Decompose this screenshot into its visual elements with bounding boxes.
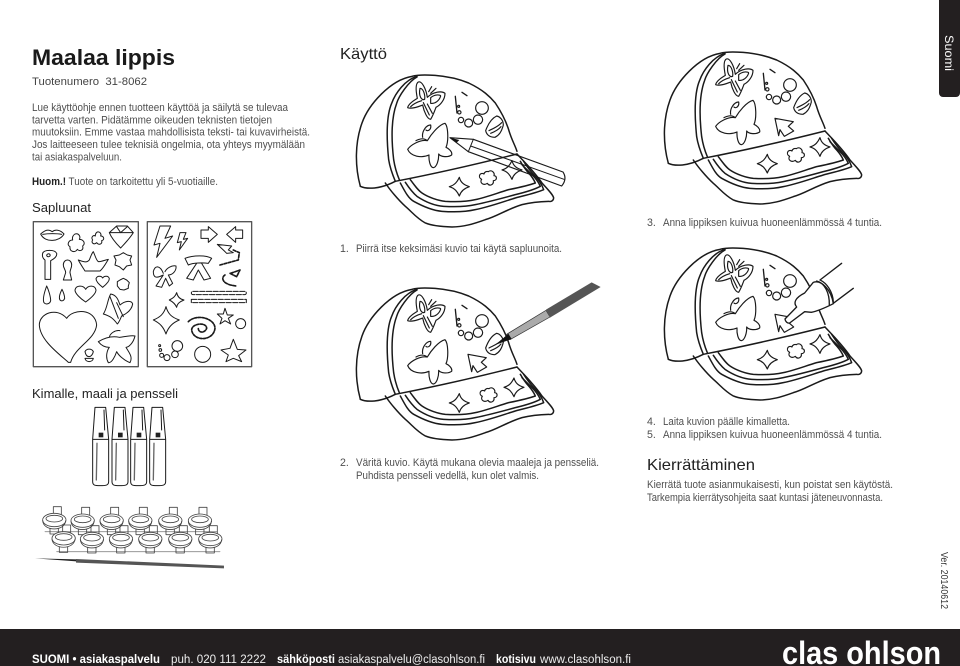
brush	[35, 558, 224, 568]
stencil sheet 1	[33, 222, 138, 367]
recycling text: Tarkempia kierrätysohjeita saat kuntasi jäteneuvonnasta.	[647, 492, 883, 504]
paint pots and brush	[35, 507, 224, 568]
contact line: kotisivu	[496, 654, 536, 666]
intro text: tai asiakaspalveluun.	[32, 152, 122, 164]
step 1 text: 1.	[340, 243, 349, 255]
contact line: asiakaspalvelu@clasohlson.fi	[338, 654, 485, 666]
version: Ver. 20140612	[938, 552, 950, 609]
contact line: sähköposti	[277, 654, 335, 666]
step 2 text: Väritä kuvio. Käytä mukana olevia maaleja ja pensseliä.	[356, 457, 599, 469]
heading: stencils: Sapluunat	[32, 200, 91, 215]
stencil sheet 2	[147, 222, 252, 367]
steps 4 and 5 text: Laita kuvion päälle kimalletta.	[663, 416, 790, 428]
cap with glitter tube: step 4	[664, 248, 862, 400]
glitter tube	[785, 263, 853, 323]
step 3 text: 3.	[647, 217, 656, 229]
step 2 text: Puhdista pensseli vedellä, kun olet valmis.	[356, 470, 539, 482]
heading: usage: Käyttö	[340, 46, 387, 63]
step 2 text	[340, 457, 599, 482]
intro text: Jos laitteeseen tulee teknisiä ongelmia, ota yhteys myymälään	[32, 139, 305, 151]
steps 4 and 5 text: Anna lippiksen kuivua huoneenlämmössä 4 tuntia.	[663, 429, 882, 441]
age warning: Huom.! Tuote on tarkoitettu yli 5-vuotiaille.	[32, 176, 218, 188]
paint pots	[43, 507, 222, 553]
intro text: muutoksiin. Emme vastaa mahdollisista teksti- tai kuvavirheistä.	[32, 126, 310, 138]
glitter tubes	[93, 407, 166, 486]
title: Maalaa lippis	[32, 45, 175, 70]
steps 4 and 5 text: 5.	[647, 429, 656, 441]
language tab: Suomi	[942, 35, 956, 71]
intro text	[32, 102, 310, 164]
cap with brush: step 2	[356, 282, 601, 440]
step 1 text: Piirrä itse keksimäsi kuvio tai käytä sapluunoita.	[356, 243, 562, 255]
contact line: puh. 020 111 2222	[171, 654, 266, 666]
footer bar	[0, 629, 960, 666]
steps 4 and 5 text	[647, 416, 882, 441]
step 2 text: 2.	[340, 457, 349, 469]
intro text: tarvetta varten. Pidätämme oikeuden teknisten tietojen	[32, 114, 272, 126]
product number: Tuotenumero 31-8062	[32, 76, 147, 88]
language tab	[939, 0, 960, 97]
cap drying: step 3	[664, 52, 862, 204]
step 3 text: Anna lippiksen kuivua huoneenlämmössä 4 tuntia.	[663, 217, 882, 229]
recycling text	[647, 479, 893, 504]
heading: glitter, paint and brush: Kimalle, maali ja pensseli	[32, 386, 178, 401]
pencil	[450, 138, 565, 186]
contact line	[32, 654, 631, 666]
contact line: www.clasohlson.fi	[539, 654, 631, 666]
heading: recycling: Kierrättäminen	[647, 457, 755, 474]
intro text: Lue käyttöohje ennen tuotteen käyttöä ja säilytä se tulevaa	[32, 102, 288, 114]
steps 4 and 5 text: 4.	[647, 416, 656, 428]
stencil sheets	[33, 222, 252, 367]
paint brush	[496, 282, 601, 345]
contact line: SUOMI • asiakaspalvelu	[32, 654, 160, 666]
cap with pencil: step 1	[356, 75, 565, 227]
recycling text: Kierrätä tuote asianmukaisesti, kun poistat sen käytöstä.	[647, 479, 893, 491]
